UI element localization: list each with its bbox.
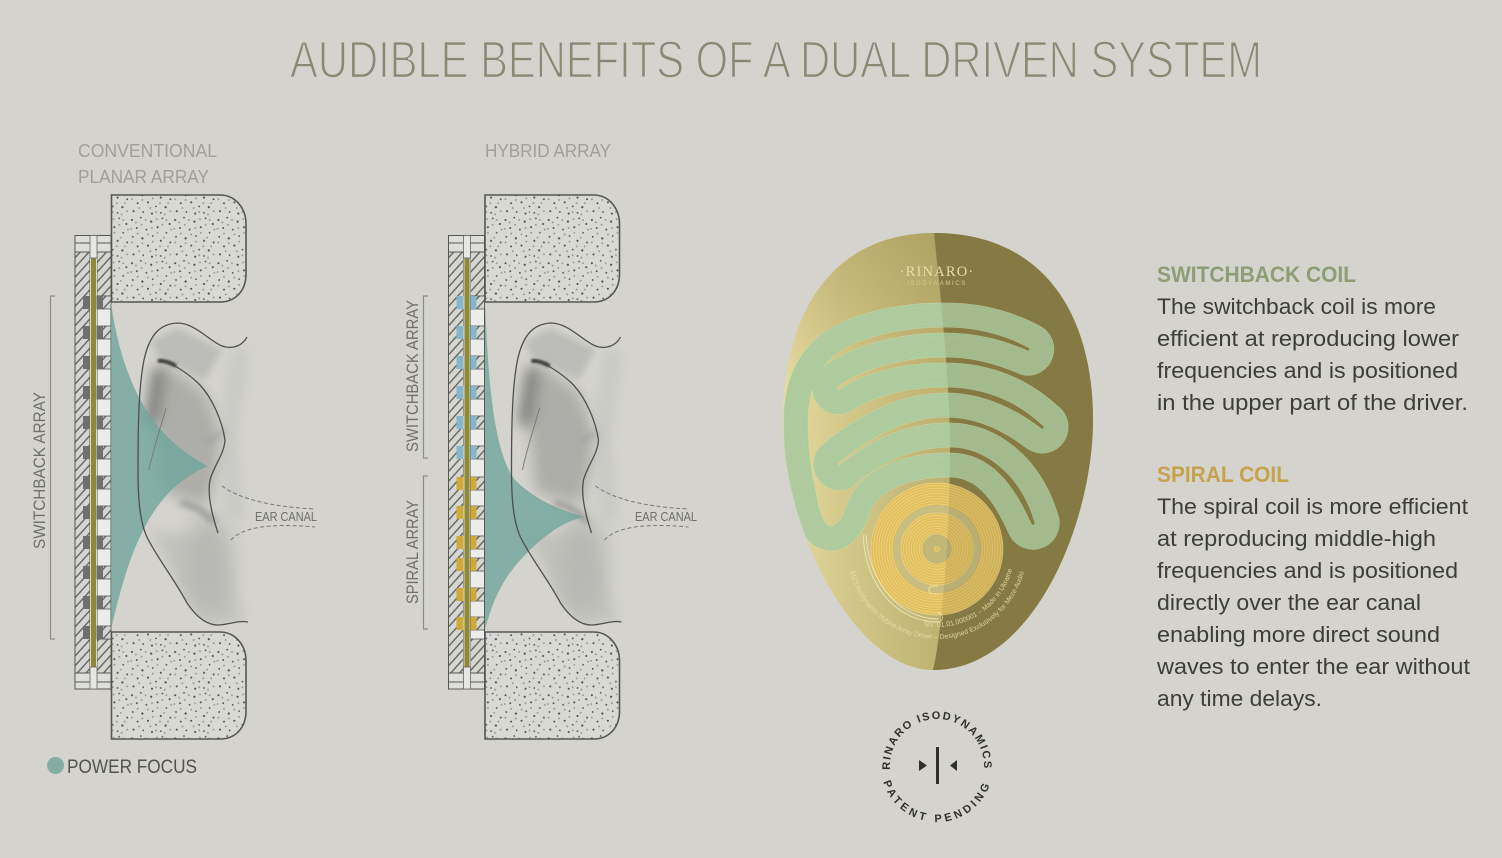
ear canal label: EAR CANAL bbox=[635, 510, 697, 524]
coil magnet rows bbox=[83, 296, 111, 639]
switchback magnet rows bbox=[456, 296, 484, 459]
switchback array label: SWITCHBACK ARRAY bbox=[31, 392, 49, 549]
seal curved text bbox=[882, 711, 992, 822]
panel: rinaro driver diaphragm bbox=[783, 233, 1093, 670]
top shading bbox=[783, 233, 1093, 420]
switchback coil bbox=[796, 315, 1056, 538]
body: switchback coil description bbox=[1157, 294, 1468, 415]
body: spiral coil description: The spiral coil is more efficient bbox=[1157, 494, 1469, 519]
driver logo: ·RINARO· bbox=[900, 264, 974, 280]
spiral bracket bbox=[424, 476, 428, 629]
seal curved text: PATENT PENDING bbox=[883, 780, 989, 822]
text block: switchback coil bbox=[1157, 262, 1468, 415]
power focus sound wave bbox=[485, 303, 584, 630]
ear canal label: EAR CANAL bbox=[255, 510, 317, 524]
driver housing and ear pads bbox=[448, 195, 620, 739]
seal centre mark bbox=[919, 747, 957, 784]
driver dark half bbox=[933, 233, 1093, 670]
heading: switchback coil: SWITCHBACK COIL bbox=[1157, 262, 1356, 287]
switchback array bracket bbox=[50, 296, 55, 639]
heading: conventional planar array bbox=[78, 140, 217, 187]
body: spiral coil description: waves to enter the ear without bbox=[1156, 654, 1471, 679]
driver housing and ear pads bbox=[75, 195, 246, 739]
seal curved text: RINARO ISODYNAMICS bbox=[882, 711, 992, 770]
driver logo bbox=[900, 264, 974, 287]
panel: conventional planar array diagram bbox=[31, 140, 317, 739]
spiral coil bbox=[863, 483, 1003, 622]
legend swatch bbox=[47, 757, 64, 774]
switchback array label: SWITCHBACK ARRAY bbox=[404, 300, 422, 452]
switchback bracket bbox=[424, 296, 428, 458]
legend: power focus bbox=[47, 757, 197, 778]
spiral magnet rows bbox=[456, 477, 484, 630]
body: switchback coil description: The switchback coil is more bbox=[1157, 294, 1436, 319]
driver curved small print: MZ3 Isodynamic Hybrid Array Driver – Designed Exclusively for Meze Audio bbox=[850, 571, 1024, 639]
body: spiral coil description: at reproducing middle-high bbox=[1157, 526, 1436, 551]
driver logo: ISODYNAMICS bbox=[907, 281, 967, 287]
power focus sound wave bbox=[111, 303, 208, 630]
body: spiral coil description: directly over the ear canal bbox=[1157, 590, 1421, 615]
ear shading bbox=[150, 328, 245, 622]
body: spiral coil description bbox=[1156, 494, 1471, 711]
body: spiral coil description: frequencies and is positioned bbox=[1157, 558, 1458, 583]
driver curved small print: SN: 01.01.000001 – Made in Ukraine bbox=[924, 568, 1012, 627]
ear shading bbox=[524, 328, 618, 622]
heading: conventional planar array: CONVENTIONAL bbox=[78, 140, 217, 161]
heading: conventional planar array: PLANAR ARRAY bbox=[78, 166, 209, 187]
dark half overlay bbox=[933, 233, 1093, 670]
ear outline bbox=[512, 323, 622, 625]
body: spiral coil description: any time delays. bbox=[1157, 686, 1322, 711]
body: switchback coil description: frequencies and is positioned bbox=[1157, 358, 1458, 383]
ear outline bbox=[138, 323, 248, 625]
title: AUDIBLE BENEFITS OF A DUAL DRIVEN SYSTEM bbox=[290, 32, 1262, 90]
body: switchback coil description: in the upper part of the driver. bbox=[1157, 390, 1468, 415]
panel: hybrid array diagram bbox=[404, 140, 697, 739]
ear canal dashed lines bbox=[596, 486, 688, 540]
heading: hybrid array: HYBRID ARRAY bbox=[485, 140, 611, 161]
spiral array label: SPIRAL ARRAY bbox=[404, 500, 422, 604]
legend label: POWER FOCUS bbox=[67, 757, 197, 778]
body: switchback coil description: efficient at reproducing lower bbox=[1157, 326, 1460, 351]
body: spiral coil description: enabling more direct sound bbox=[1157, 622, 1440, 647]
driver egg shape, light half bbox=[783, 233, 1093, 670]
seal: rinaro isodynamics patent pending bbox=[882, 711, 992, 822]
heading: spiral coil: SPIRAL COIL bbox=[1157, 462, 1289, 487]
ear canal dashed lines bbox=[222, 486, 315, 540]
text block: spiral coil bbox=[1156, 462, 1471, 711]
